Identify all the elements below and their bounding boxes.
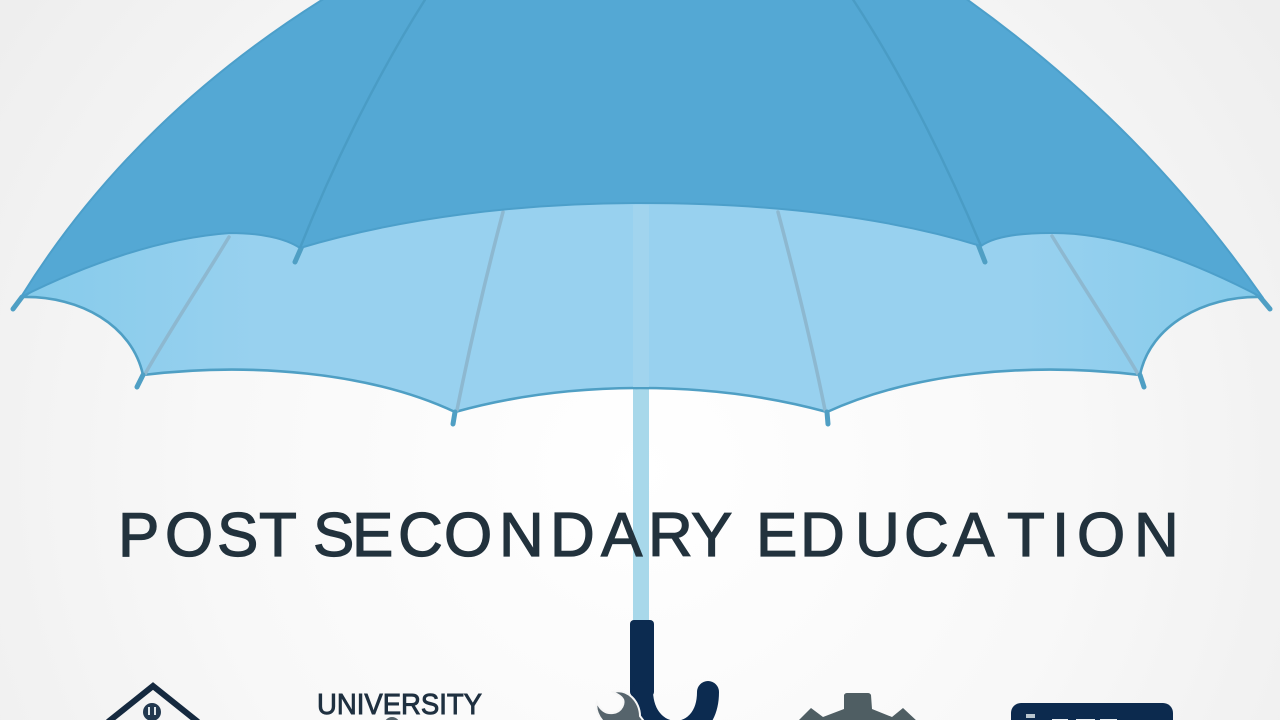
icon: house [108, 686, 198, 720]
title: POSTSECONDARYEDUCATION [118, 501, 1179, 570]
icon: gear [797, 693, 918, 720]
canopy center stripe [633, 205, 649, 387]
icon: wrench [596, 691, 646, 720]
card panel [1011, 703, 1173, 720]
umbrella handle [630, 620, 708, 720]
rib tips [13, 244, 1270, 424]
umbrella shaft [633, 385, 649, 621]
canopy underside [23, 120, 1260, 412]
top canopy ribs [300, 0, 981, 248]
canopy top [21, 0, 1263, 298]
underside ribs [145, 212, 1138, 410]
